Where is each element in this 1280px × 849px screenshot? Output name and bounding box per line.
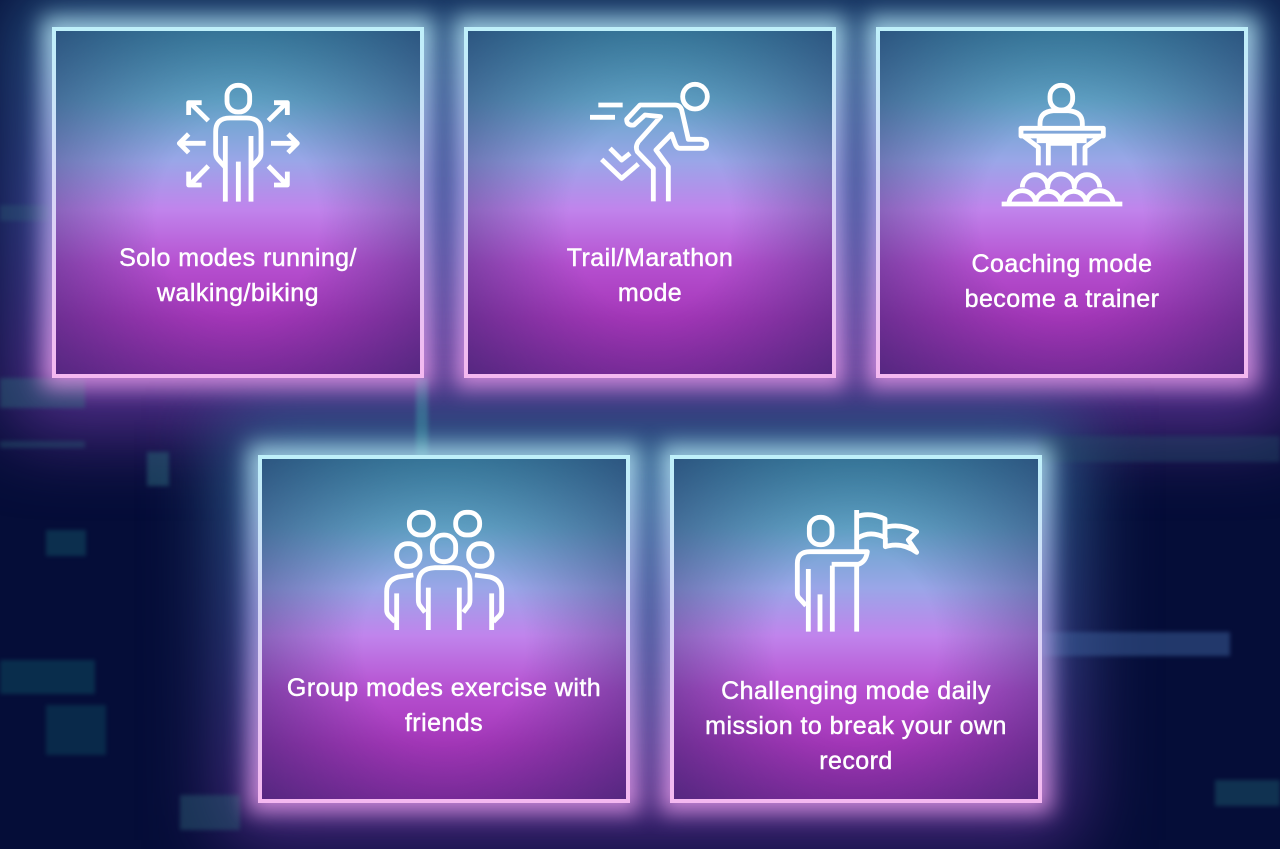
panel: group modes xyxy=(258,455,630,803)
label: trail and marathon: mode xyxy=(618,279,682,307)
panel: coaching mode xyxy=(876,27,1248,378)
label: challenging mode: Challenging mode daily xyxy=(721,677,991,705)
label: coaching xyxy=(965,250,1159,313)
icon: speaker at podium with audience xyxy=(1002,82,1122,206)
panel: challenging mode xyxy=(670,455,1042,803)
label: group modes xyxy=(287,674,601,737)
icon: person with arrows in all directions xyxy=(176,82,300,202)
label: solo modes: walking/biking xyxy=(157,279,319,307)
label: challenging mode: mission to break your own xyxy=(705,712,1007,740)
icon: runner xyxy=(590,82,710,202)
icon: group of people xyxy=(384,510,504,630)
panel: solo modes xyxy=(52,27,424,378)
label: coaching: Coaching mode xyxy=(972,250,1152,278)
label: challenging mode xyxy=(705,677,1007,775)
label: challenging mode: record xyxy=(819,747,893,775)
label: solo modes: Solo modes running/ xyxy=(119,244,357,272)
label: group modes: friends xyxy=(405,709,483,737)
label: trail and marathon: Trail/Marathon xyxy=(567,244,733,272)
panel: trail and marathon mode xyxy=(464,27,836,378)
label: solo modes xyxy=(119,244,357,307)
label: coaching: become a trainer xyxy=(965,285,1159,313)
label: group modes: Group modes exercise with xyxy=(287,674,601,702)
icon: person holding flag xyxy=(794,510,920,632)
label: trail and marathon xyxy=(567,244,733,307)
